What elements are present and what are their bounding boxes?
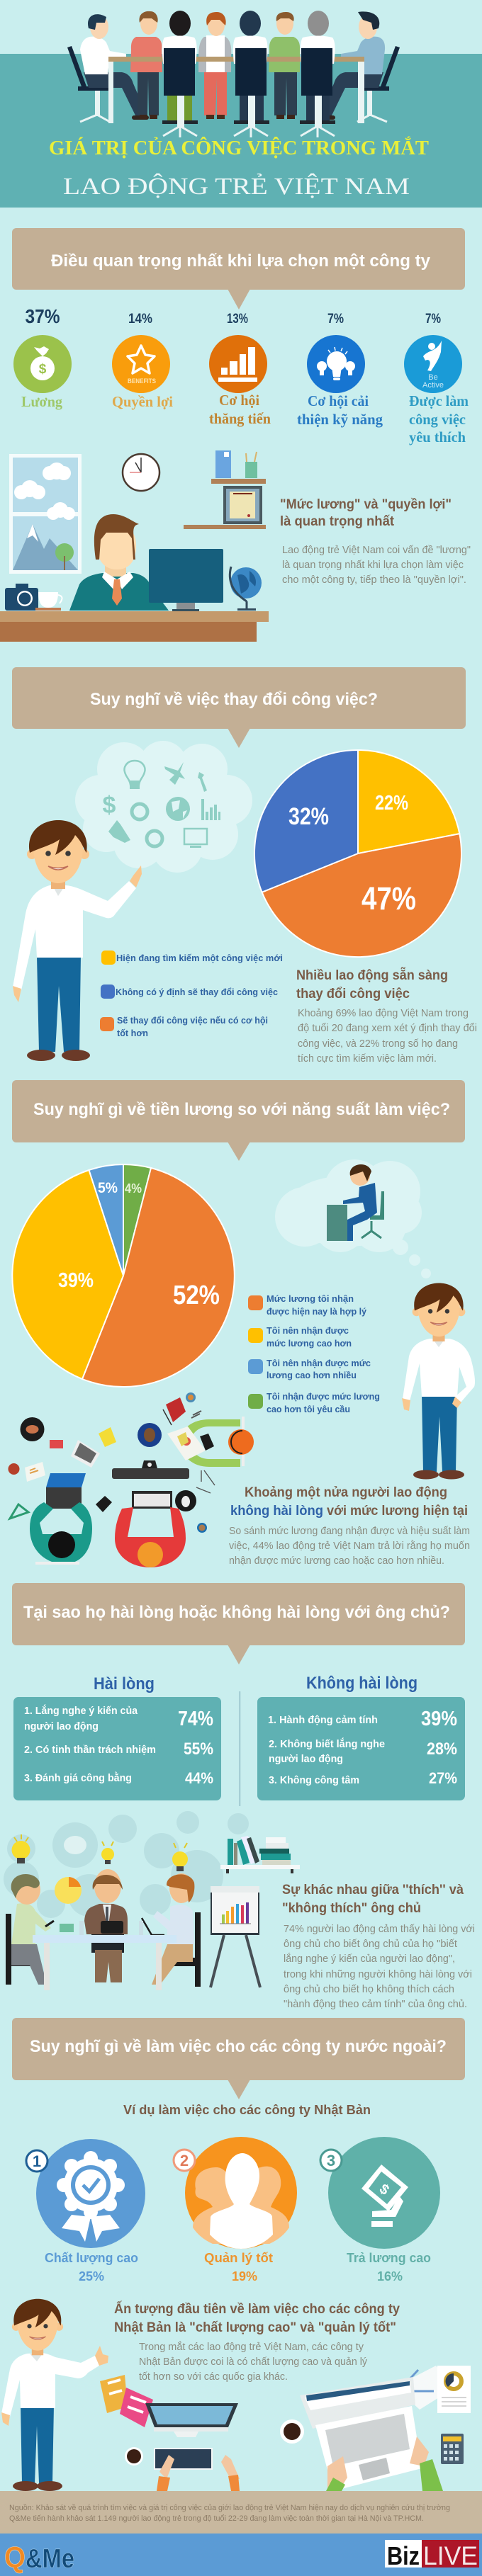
desk items: camera, cup, globe	[5, 567, 262, 611]
section 2 heading banner: Suy nghĩ về việc thay đổi công việc?	[90, 690, 378, 709]
factor percentages: 14%	[128, 312, 152, 327]
worker	[69, 514, 169, 611]
thought cloud with icons: $	[103, 792, 116, 819]
factor labels: công việc	[409, 411, 466, 428]
icon: high pay note in hand	[328, 2137, 440, 2249]
panel: dissatisfied reasons	[257, 1697, 465, 1800]
column headings	[94, 1674, 417, 1693]
salary takeaway text: không hài lòng	[230, 1504, 323, 1519]
legend: salary views: mức lương cao hơn	[267, 1338, 352, 1349]
salary takeaway text: là quan trọng nhất khi lựa chọn làm việc	[282, 560, 464, 571]
boss takeaway text: ông chủ cho biết họ không thích cách	[284, 1984, 454, 1995]
illustration: desk with computer and keyboard	[100, 2375, 240, 2491]
factor labels: Lương	[21, 393, 62, 410]
section 4 heading banner: Tại sao họ hài lòng hoặc không hài lòng với ông chủ?	[23, 1603, 450, 1622]
section 4 heading banner	[12, 1583, 465, 1664]
panel: satisfied reasons: người lao động	[24, 1720, 99, 1732]
factor percentages: 13%	[227, 312, 248, 327]
legend: salary views: lương cao hơn nhiều	[267, 1370, 357, 1380]
salary takeaway text: cho một công ty, tiếp theo là "quyền lợi".	[282, 574, 466, 586]
legend: salary views: Mức lương tôi nhận	[267, 1293, 354, 1304]
legend: salary views: Tôi nhận được mức lương	[267, 1391, 380, 1402]
pie chart: salary vs productivity: 52%	[173, 1281, 220, 1310]
Japanese firm takeaway text: Nhật Bản được coi là có chất lượng cao và quản lý	[139, 2356, 368, 2368]
factor labels: Được làm	[409, 392, 469, 409]
legend: job change: Sẽ thay đổi công việc nếu có cơ hội	[117, 1015, 268, 1026]
panel: dissatisfied reasons: 27%	[429, 1769, 457, 1787]
impression labels: Quản lý tốt	[204, 2251, 273, 2265]
column headings: Hài lòng	[94, 1674, 155, 1693]
idea bulbs	[11, 1834, 188, 1871]
boss takeaway text: "hành động theo cảm tính" của ông chủ.	[284, 1999, 467, 2010]
thinking man	[402, 1283, 475, 1479]
section 5 heading banner	[12, 2018, 465, 2099]
panel: satisfied reasons: 2. Có tinh thần trách nhiệm	[24, 1744, 156, 1756]
boss takeaway text: 74% người lao động cảm thấy hài lòng với	[284, 1924, 475, 1935]
impression labels: Trả lương cao	[347, 2251, 431, 2265]
boss takeaway text: Sự khác nhau giữa ''thích'' và	[282, 1883, 464, 1897]
panel: satisfied reasons	[13, 1697, 221, 1800]
panel: dissatisfied reasons: 3. Không công tâm	[269, 1774, 359, 1786]
title: LAO ĐỘNG TRẺ VIỆT NAM	[63, 173, 410, 200]
illustration: meeting with ideas	[4, 1811, 300, 1990]
factor labels: yêu thích	[409, 429, 466, 446]
impression labels: Chất lượng cao	[45, 2251, 138, 2265]
section 2 heading banner	[12, 667, 466, 748]
panel: dissatisfied reasons: 39%	[421, 1708, 457, 1730]
factor labels: Cơ hội	[219, 392, 259, 409]
source note band	[0, 2491, 482, 2534]
salary takeaway text: nhận được mức lương cao hoặc cao hơn nhiều.	[229, 1555, 444, 1567]
section 3 heading banner: Suy nghĩ gì về tiền lương so với năng suất làm việc?	[33, 1100, 450, 1119]
Japanese firm takeaway text: Trong mắt các lao động trẻ Việt Nam, các công ty	[139, 2341, 364, 2353]
legend: salary views	[248, 1293, 380, 1414]
shelves with binder, pencil cup and certificate	[184, 450, 266, 529]
section 3 heading banner	[12, 1080, 465, 1161]
icon: benefits star: BENEFITS	[128, 378, 156, 385]
table	[108, 57, 364, 123]
pie chart: salary vs productivity: 39%	[58, 1269, 94, 1292]
boss takeaway text: "không thích" ông chủ	[282, 1901, 421, 1916]
window	[9, 454, 82, 574]
panel: dissatisfied reasons: 28%	[427, 1740, 457, 1759]
salary takeaway text: với mức lương hiện tại	[327, 1504, 468, 1519]
impression labels: 16%	[377, 2269, 403, 2283]
icon: be active figure: Active	[422, 381, 444, 390]
section 1 heading banner	[12, 228, 465, 310]
legend: salary views: được hiện nay là hợp lý	[267, 1306, 367, 1317]
icon: be active figure	[404, 335, 462, 393]
factor labels: Quyền lợi	[112, 393, 173, 410]
job change takeaway text: công việc, và 22% trong số họ đang	[298, 1038, 458, 1050]
icon: be active figure: Be	[428, 373, 438, 382]
logo: BizLIVE: LIVE	[423, 2541, 478, 2570]
panel: dissatisfied reasons: người lao động	[269, 1753, 343, 1765]
icon: career bars	[209, 335, 267, 393]
presenter man	[13, 820, 142, 1061]
bookshelf	[220, 1836, 300, 1873]
salary takeaway text: So sánh mức lương đang nhận được và hiệu suất làm	[229, 1526, 470, 1537]
icon: management team silhouettes	[185, 2137, 297, 2249]
header band	[0, 54, 482, 208]
salary takeaway text: Khoảng một nửa người lao động	[245, 1485, 447, 1500]
impression labels: 25%	[79, 2269, 104, 2283]
boss takeaway text: lắng nghe ý kiến của người lao động",	[284, 1953, 455, 1965]
impression labels	[45, 2251, 431, 2283]
backs of colleagues on chairs	[162, 11, 335, 137]
factor percentages: 7%	[425, 312, 441, 327]
table	[33, 1921, 176, 1990]
panel: satisfied reasons: 55%	[184, 1740, 213, 1759]
factor percentages: 37%	[26, 305, 60, 327]
factor labels: thăng tiến	[209, 410, 271, 427]
right colleague	[142, 1873, 201, 1987]
footer band	[0, 2534, 482, 2576]
job change takeaway text: Khoảng 69% lao động Việt Nam trong	[298, 1008, 469, 1019]
salary takeaway text	[280, 497, 471, 586]
logo: Q&Me: Q	[4, 2541, 26, 2574]
illustration: laptop with papers and calculator	[280, 2366, 471, 2491]
icon: benefits star	[112, 335, 170, 393]
source note band: Q&Me tiến hành khảo sát 1.149 người lao động trẻ trong độ tuổi 22-29 đang làm việc toàn thời gian tại Hà Nội và TP.HCM.	[9, 2514, 424, 2523]
boss takeaway text	[282, 1883, 475, 2010]
pie chart: job change: 22%	[375, 792, 408, 815]
salary takeaway text: là quan trọng nhất	[280, 514, 395, 529]
salary takeaway text: việc, 44% lao động trẻ Việt Nam trả lời rằng họ muốn	[229, 1540, 470, 1552]
salary takeaway text	[229, 1485, 470, 1567]
badge 2: 2	[180, 2152, 189, 2169]
logo: Q&Me	[4, 2541, 74, 2574]
panel: satisfied reasons: 44%	[185, 1769, 213, 1787]
legend: salary views: cao hơn tôi yêu cầu	[267, 1404, 350, 1414]
legend: job change: tốt hơn	[117, 1028, 148, 1038]
logo: Q&Me: &Me	[26, 2544, 74, 2574]
panel: satisfied reasons: 74%	[178, 1708, 213, 1730]
salary takeaway text: Lao động trẻ Việt Nam coi vấn đề "lương"	[282, 545, 471, 556]
factor labels: thiện kỹ năng	[297, 411, 383, 428]
computer monitor	[149, 549, 223, 611]
pie chart: job change: 47%	[362, 880, 416, 917]
section 1 heading banner: Điều quan trọng nhất khi lựa chọn một công ty	[51, 251, 431, 271]
pie chart: salary vs productivity: 5%	[98, 1180, 118, 1196]
job change takeaway text: Nhiều lao động sẵn sàng	[296, 967, 448, 983]
illustration: top-down desk teamwork	[9, 1392, 254, 1567]
panel: dissatisfied reasons: 1. Hành động cảm tính	[268, 1714, 378, 1726]
panel: satisfied reasons: 3. Đánh giá công bằng	[24, 1771, 132, 1784]
pie chart: job change	[254, 750, 461, 957]
panel: satisfied reasons: 1. Lắng nghe ý kiến của	[24, 1704, 138, 1717]
Japanese firm takeaway text: tốt hơn so với các quốc gia khác.	[139, 2371, 288, 2383]
icon: quality rosette	[36, 2139, 145, 2248]
icon: high pay note in hand: $	[376, 2181, 392, 2198]
factor labels	[21, 392, 469, 446]
desk	[0, 611, 269, 642]
Japanese firm takeaway text: Ấn tượng đầu tiên về làm việc cho các công ty	[114, 2301, 400, 2317]
legend: job change: Hiện đang tìm kiếm một công việc mới	[116, 953, 283, 963]
legend: salary views: Tôi nên nhận được mức	[267, 1358, 371, 1368]
thought cloud: employee at desk	[275, 1159, 431, 1278]
icon: salary money bag	[13, 335, 72, 393]
impression labels: 19%	[232, 2269, 257, 2283]
job change takeaway text: thay đổi công việc	[296, 987, 410, 1002]
illustration: team meeting around a table	[67, 11, 400, 137]
job change takeaway text: độ tuổi 20 đang xem xét ý định thay đổi	[298, 1023, 477, 1034]
logo: BizLIVE	[385, 2540, 479, 2570]
illustration: office worker at a desk	[0, 450, 269, 642]
logo: BizLIVE: Biz	[387, 2541, 420, 2570]
factor percentages	[26, 305, 441, 327]
pie chart: salary vs productivity: 4%	[125, 1181, 142, 1196]
Japanese firm takeaway text	[114, 2301, 400, 2383]
legend: job change	[100, 951, 283, 1038]
left seated man with chair	[67, 14, 149, 122]
presenter man	[1, 2299, 108, 2491]
icon: salary money bag: $	[39, 362, 47, 377]
title: GIÁ TRỊ CỦA CÔNG VIỆC TRONG MẮT	[49, 135, 429, 159]
section 5 heading banner: Suy nghĩ gì về làm việc cho các công ty nước ngoài?	[30, 2037, 447, 2056]
boss takeaway text: trong khi những người không hài lòng với	[284, 1969, 472, 1980]
Japanese firm takeaway text: Nhật Bản là "chất lượng cao" và "quản lý tốt"	[114, 2320, 396, 2335]
factor percentages: 7%	[327, 312, 344, 327]
pie chart: job change: 32%	[288, 803, 329, 830]
clock	[123, 454, 159, 491]
badge 2	[174, 2150, 195, 2171]
legend: job change: Không có ý định sẽ thay đổi công việc	[116, 987, 278, 997]
subheading: Ví dụ làm việc cho các công ty Nhật Bản	[123, 2103, 371, 2117]
pie chart: salary vs productivity	[12, 1164, 235, 1387]
badge 3: 3	[327, 2152, 335, 2169]
column headings: Không hài lòng	[306, 1674, 417, 1693]
left colleague	[6, 1874, 54, 1985]
presentation board	[211, 1886, 260, 1987]
icon: skill light bulbs	[307, 335, 365, 393]
badge 1: 1	[33, 2152, 41, 2170]
badge 1	[26, 2150, 47, 2172]
small pie icon	[55, 1877, 82, 1904]
job change takeaway text	[296, 967, 477, 1065]
title	[49, 135, 429, 200]
job change takeaway text: tích cực tìm kiếm việc làm mới.	[298, 1053, 437, 1065]
factor labels: Cơ hội cải	[308, 392, 369, 409]
boss takeaway text: ông chủ cho biết ông chủ của họ "biết	[284, 1939, 457, 1950]
badge 3	[320, 2150, 342, 2171]
panel: dissatisfied reasons: 2. Không biết lắng nghe	[269, 1737, 385, 1750]
front-facing colleagues	[130, 11, 300, 119]
source note band: Nguồn: Khảo sát về quá trình tìm việc và giá trị công việc của giới lao động trẻ Việt Nam hiện nay do dịch vụ nghiên cứu thị trường	[9, 2504, 450, 2512]
salary takeaway text: "Mức lương" và "quyền lợi"	[280, 497, 452, 512]
thought cloud with icons	[75, 741, 252, 873]
legend: salary views: Tôi nên nhận được	[267, 1325, 349, 1336]
center colleague	[84, 1869, 128, 1982]
right seated man with chair	[318, 11, 400, 122]
